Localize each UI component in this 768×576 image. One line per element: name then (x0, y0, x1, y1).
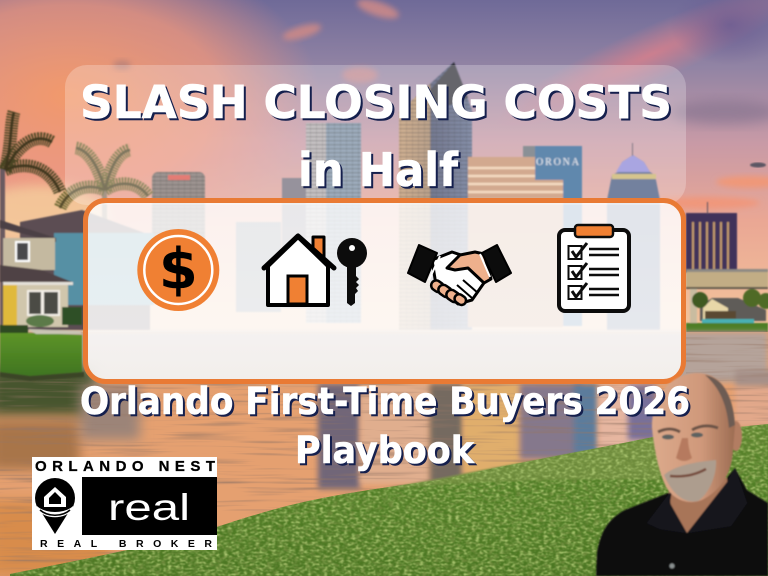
subtitle: Orlando First-Time Buyers 2026 (80, 380, 690, 423)
skyline buildings: ORONA (536, 157, 580, 168)
icon panel (86, 200, 684, 382)
left waterfront houses and lawn (0, 210, 154, 381)
logo black panel: real (108, 487, 190, 528)
skyline buildings (152, 62, 737, 330)
title (80, 76, 672, 197)
water with reflections (0, 332, 768, 576)
icon: checklist clipboard (559, 225, 629, 311)
icon: house and key (264, 236, 367, 306)
logo: Orlando Nest Real Broker: REAL BROKER (40, 538, 212, 550)
subtitle: Playbook (295, 429, 475, 472)
logo: Orlando Nest Real Broker: ORLANDO NEST (35, 458, 215, 475)
left palm trees (0, 112, 148, 333)
background: sunset sky (0, 0, 768, 340)
icon: handshake (408, 245, 511, 307)
portrait: man in black polo (596, 373, 768, 576)
overpass and far-bank house (686, 269, 768, 337)
logo black panel (82, 477, 217, 535)
title: SLASH CLOSING COSTS (80, 76, 672, 129)
icon: dollar coin (137, 229, 219, 311)
translucent title panel (65, 65, 686, 205)
logo pin mark (35, 478, 75, 534)
grassy shoreline (10, 424, 768, 576)
title: in Half (298, 143, 459, 197)
subtitle (80, 380, 690, 472)
icon: dollar coin: $ (159, 237, 198, 302)
logo: Orlando Nest Real Broker (32, 457, 217, 550)
